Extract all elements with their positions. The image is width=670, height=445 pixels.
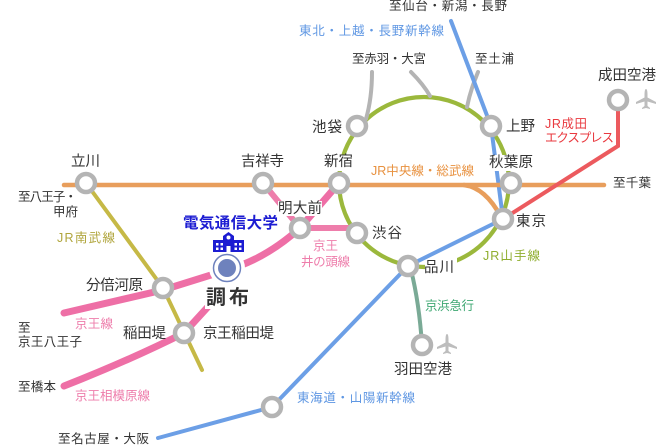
- label: Shinjuku: 新宿: [324, 153, 353, 170]
- label: Keio Line: 京王線: [75, 316, 113, 331]
- white plate behind Shinjuku label: [322, 155, 355, 171]
- label: to Hachioji and Kofu: [18, 190, 78, 219]
- station: Bubaigawara: [154, 279, 172, 297]
- station: Shinagawa: [399, 257, 417, 275]
- label: Haneda Airport: 羽田空港: [394, 361, 452, 378]
- line: Keikyu: [411, 270, 422, 345]
- label: JR Narita Express: JR成田: [545, 117, 587, 131]
- station: Narita Airport: [609, 91, 627, 109]
- line: Keio main: [64, 183, 339, 313]
- branch: to Akabane and Omiya: [366, 72, 430, 119]
- station: Kichijoji: [254, 174, 272, 192]
- station: Inadazutsumi: [175, 324, 193, 342]
- label: JR Nambu Line: JR南武線: [57, 230, 115, 245]
- station: Shibuya: [348, 224, 366, 242]
- line: Keio Sagamihara: [64, 286, 227, 386]
- white halo around Chofu: [209, 250, 245, 286]
- label: to Tsuchiura: 至土浦: [475, 52, 514, 66]
- white plate behind Meidaimae label: [278, 201, 322, 216]
- label: Tokyo: 東京: [516, 213, 546, 230]
- line: Keio Inokashira: [263, 183, 357, 228]
- label: Shinagawa: 品川: [424, 259, 454, 276]
- label: Keio-Inadazutsumi: 京王稲田堤: [203, 325, 274, 342]
- label: Narita Airport: 成田空港: [598, 67, 656, 84]
- label: to Keio-Hachioji: [18, 321, 82, 349]
- icon: airplane at Haneda: [437, 334, 457, 354]
- label: to Akabane and Omiya: 至赤羽・大宮: [352, 51, 426, 66]
- label: Tachikawa: 立川: [71, 153, 100, 170]
- label: to Hachioji and Kofu: 甲府: [53, 205, 78, 219]
- label: JR Narita Express: [545, 117, 614, 145]
- station: Akihabara: [502, 174, 520, 192]
- label: Tohoku, Joetsu, Nagano Shinkansen: 東北・上越・長野新幹線: [299, 23, 444, 38]
- station: Ikebukuro: [348, 117, 366, 135]
- white gap in Yamanote loop at Shinagawa label: [425, 252, 457, 278]
- label: Ikebukuro: 池袋: [312, 119, 342, 136]
- station: Shinjuku: [330, 174, 348, 192]
- label: to Keio-Hachioji: 京王八王子: [18, 335, 82, 349]
- label: Kichijoji: 吉祥寺: [241, 153, 284, 170]
- station: Chofu marker: [214, 254, 240, 282]
- white plate behind Chofu label: [205, 285, 251, 309]
- station: Haneda Airport: [413, 336, 431, 354]
- label: Keio Sagamihara Line: 京王相模原線: [75, 388, 150, 403]
- icon: airplane at Narita: [636, 89, 656, 109]
- label: JR Narita Express: エクスプレス: [545, 131, 614, 145]
- station: Meidaimae: [291, 219, 309, 237]
- label: JR Chuo and Sobu Lines: JR中央線・総武線: [371, 163, 474, 178]
- line: Tohoku Shinkansen: [451, 21, 503, 219]
- label: Inadazutsumi: 稲田堤: [123, 325, 166, 342]
- label: to Keio-Hachioji: 至: [18, 321, 31, 335]
- label: Tokaido and Sanyo Shinkansen: 東海道・山陽新幹線: [297, 390, 415, 405]
- label: Keikyu Line: 京浜急行: [425, 298, 474, 313]
- station: Ueno: [482, 117, 500, 135]
- branch: to Tsuchiura: [467, 72, 478, 107]
- icon: university building: [213, 232, 244, 252]
- white plate behind Akihabara label: [488, 155, 534, 171]
- label: to Hachioji and Kofu: 至八王子・: [18, 190, 77, 204]
- label: to Hashimoto: 至橋本: [18, 380, 56, 394]
- label: Ueno: 上野: [506, 118, 536, 135]
- label: Keio Inokashira Line: [301, 239, 350, 269]
- label: to Chiba: 至千葉: [613, 176, 651, 190]
- station: Tachikawa: [77, 174, 95, 192]
- label: University of Electro-Communications: 電気通信大学: [183, 213, 278, 232]
- label: Shibuya: 渋谷: [372, 225, 402, 242]
- label: Chofu: 調布: [206, 286, 249, 309]
- line: JR Yamanote loop: [339, 97, 509, 267]
- station: Shin-Yokohama: [263, 398, 281, 416]
- line: JR Nambu: [86, 183, 202, 370]
- label: Bubaigawara: 分倍河原: [86, 277, 143, 294]
- label: JR Yamanote Line: JR山手線: [483, 248, 540, 263]
- label: Akihabara: 秋葉原: [489, 154, 533, 171]
- label: Keio Inokashira Line: 京王: [313, 239, 338, 253]
- line: JR Narita Express: [503, 100, 618, 219]
- station: Tokyo: [494, 210, 512, 228]
- line: Chuo and Sobu: [64, 185, 604, 217]
- line: Tokaido Shinkansen: [158, 219, 503, 438]
- label: Keio Inokashira Line: 井の頭線: [301, 254, 350, 269]
- label: Meidaimae: 明大前: [278, 200, 322, 217]
